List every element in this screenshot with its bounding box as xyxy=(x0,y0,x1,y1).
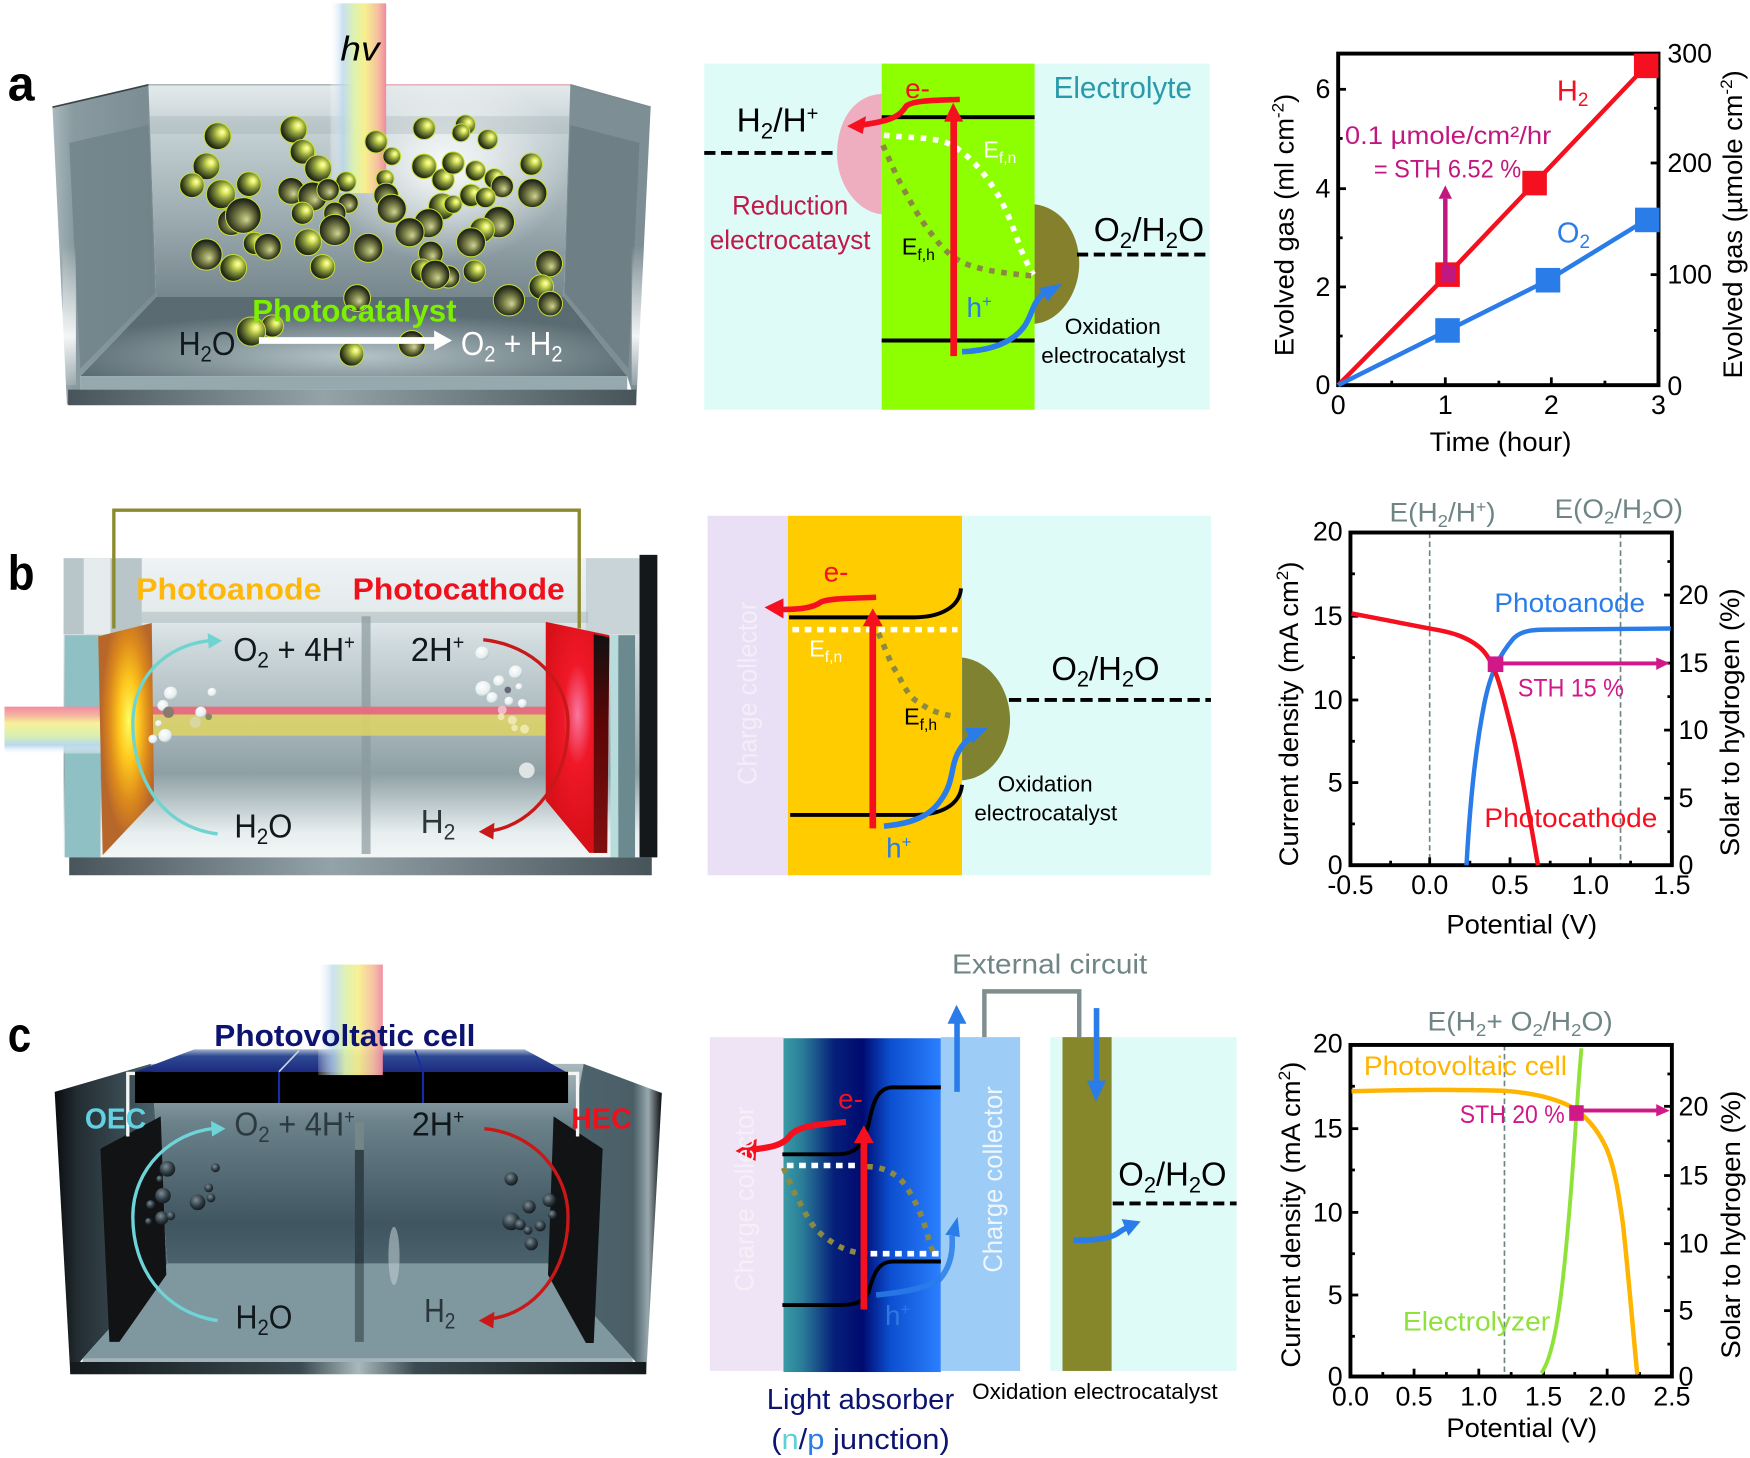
panel: photoelectrochemical tank: 2H xyxy=(411,632,454,669)
chart: current density b: /H xyxy=(1614,494,1642,524)
arrow: water to products xyxy=(259,330,452,351)
chart: current density c: 10 xyxy=(1679,1229,1708,1259)
chart: current density c: 2 xyxy=(1275,1071,1294,1080)
chart: current density b: 0 xyxy=(1328,850,1343,880)
panel: band diagram a: O xyxy=(1178,212,1204,249)
panel: PV electrolyzer tank: H xyxy=(235,1299,260,1337)
chart: current density b: Photoanode xyxy=(1494,588,1645,618)
chart: current density b: O) xyxy=(1652,494,1683,524)
panel: photoelectrochemical tank: O xyxy=(233,632,259,669)
photocathode plate xyxy=(546,622,609,853)
panel: band diagram a: /H xyxy=(1132,212,1166,249)
label: O2 + H2: 2 xyxy=(551,342,563,367)
arrow: hole xyxy=(876,1217,960,1295)
chart: evolved gas vs time: 300 xyxy=(1667,39,1712,69)
panel: band diagram b: /H xyxy=(1089,651,1122,688)
chart: current density b: 1.5 xyxy=(1653,870,1690,900)
arrow: hole xyxy=(884,728,988,826)
panel: band diagram b: e- xyxy=(824,557,848,588)
chart: current density b: 0.0 xyxy=(1411,870,1448,900)
panel: band diagram c: Light absorber xyxy=(767,1384,955,1416)
panel: band diagram a: f,n xyxy=(999,150,1016,167)
panel: PV electrolyzer tank: 2 xyxy=(257,1315,269,1340)
chart: current density b: 10 xyxy=(1313,685,1343,715)
chart: current density c: 20 xyxy=(1313,1029,1343,1059)
PV cell xyxy=(135,1049,568,1103)
panel: band diagram b: + xyxy=(902,832,911,851)
panel letter b: b xyxy=(8,546,35,600)
chart: current density b: -0.5 xyxy=(1327,870,1374,900)
chart: evolved gas vs time: ) xyxy=(1270,94,1300,103)
chart: evolved gas vs time: 2 xyxy=(1579,232,1590,253)
chart: current density c: O) xyxy=(1581,1006,1613,1036)
chart: current density b: 15 xyxy=(1679,648,1708,678)
arrow: hole xyxy=(962,284,1062,352)
panel: PV electrolyzer tank: 2 xyxy=(258,1122,270,1147)
panel: band diagram a: + xyxy=(807,104,818,126)
panel: band diagram a xyxy=(704,64,1210,410)
panel: PV electrolyzer tank: OEC xyxy=(85,1104,146,1136)
chart: evolved gas vs time: Evolved gas (µmole cm xyxy=(1718,100,1748,378)
panel: PV electrolyzer tank xyxy=(55,965,662,1374)
chart: current density b: Photocathode xyxy=(1484,803,1657,833)
panel: band diagram a: h xyxy=(967,292,982,323)
chart: current density b: Solar to hydrogen (%) xyxy=(1715,588,1745,856)
chart: current density b xyxy=(1273,494,1745,939)
panel: band diagram c: (n/p junction) xyxy=(771,1424,950,1456)
bubbles xyxy=(145,1161,557,1250)
label: O2 + H2: + H xyxy=(495,326,551,363)
panel: photoelectrochemical tank: + xyxy=(453,633,464,655)
bubbles xyxy=(148,646,535,778)
chart: evolved gas vs time: = STH 6.52 % xyxy=(1374,157,1521,184)
label: Photoanode: Photoanode xyxy=(136,573,321,607)
panel: photoelectrochemical tank: H xyxy=(234,808,259,845)
chart: evolved gas vs time: 2 xyxy=(1578,90,1588,111)
chart: evolved gas vs time: 0 xyxy=(1331,390,1346,420)
chart: evolved gas vs time: ) xyxy=(1718,70,1748,79)
chart: evolved gas vs time: 2 xyxy=(1544,390,1559,420)
panel: PV electrolyzer tank: H xyxy=(424,1293,448,1330)
chart: current density b: 2 xyxy=(1604,508,1614,528)
arrow: proton reduction cycle xyxy=(479,1129,568,1328)
chart: current density b: ) xyxy=(1274,562,1304,571)
chart: current density c: Photovoltaic cell xyxy=(1364,1051,1567,1081)
panel: band diagram b: f,h xyxy=(920,717,937,734)
panel: band diagram b: electrocatalyst xyxy=(974,801,1118,826)
external wire xyxy=(114,510,579,629)
chart: current density c: 2.5 xyxy=(1653,1382,1690,1412)
chart: current density b: 0 xyxy=(1679,850,1693,880)
panel: photoelectrochemical tank: 2 xyxy=(444,820,455,845)
chart: current density b: 5 xyxy=(1328,768,1343,798)
chart: current density c: 1.0 xyxy=(1460,1382,1497,1412)
chart: current density b: ) xyxy=(1486,497,1496,527)
chart: current density b: 2 xyxy=(1438,511,1448,531)
chart: current density c: 0 xyxy=(1328,1361,1343,1391)
chart: current density c: 2 xyxy=(1571,1020,1582,1040)
panel: PV electrolyzer tank: HEC xyxy=(571,1104,632,1136)
panel: band diagram a: + xyxy=(982,292,992,311)
panel: band diagram a: H xyxy=(737,103,761,140)
chart: current density b: 2 xyxy=(1273,571,1292,580)
arrow: STH operating point xyxy=(1488,656,1670,672)
panel: band diagram a: Oxidation xyxy=(1065,314,1161,339)
light beam b xyxy=(4,707,546,754)
arrow: excitation xyxy=(854,1125,874,1310)
chart: evolved gas vs time: 100 xyxy=(1667,260,1712,290)
chart: current density b: /H xyxy=(1448,497,1476,527)
panel: PV electrolyzer tank: + 4H xyxy=(270,1106,344,1143)
panel: band diagram c: External circuit xyxy=(952,948,1148,979)
label: O2 + H2: O xyxy=(461,326,487,363)
chart: current density c: /H xyxy=(1543,1006,1571,1036)
panel: band diagram a: Electrolyte xyxy=(1054,72,1192,105)
chart: current density c: 15 xyxy=(1313,1114,1343,1144)
chart: current density b: Potential (V) xyxy=(1446,909,1597,939)
panel: PV electrolyzer tank: 2 xyxy=(445,1308,455,1333)
panel: band diagram a: electrocatalyst xyxy=(1041,343,1186,368)
curve: quasi-Fermi level n xyxy=(884,135,1033,275)
panel: band diagram b: h xyxy=(886,832,902,863)
panel letter c: c xyxy=(8,1009,31,1063)
chart: current density c: Potential (V) xyxy=(1446,1413,1597,1443)
chart: current density c: Electrolyzer xyxy=(1403,1307,1550,1337)
arrow: external current up xyxy=(948,1005,967,1092)
chart: current density b: + xyxy=(1476,497,1486,516)
arrow: excitation xyxy=(863,608,883,828)
chart: current density c: + O xyxy=(1486,1006,1532,1036)
chart: evolved gas vs time: 2 xyxy=(1315,272,1330,302)
panel: photoelectrochemical tank: + 4H xyxy=(269,632,344,669)
electrode: HEC xyxy=(548,1116,603,1343)
arrow: electron xyxy=(735,1122,846,1161)
chart: current density c: Solar to hydrogen (%) xyxy=(1716,1091,1746,1359)
panel: photoelectrochemical tank: 2 xyxy=(257,824,268,849)
label: Photovoltatic cell: Photovoltatic cell xyxy=(214,1020,475,1053)
panel: band diagram a: 2 xyxy=(1120,228,1132,253)
chart: current density c: 0.5 xyxy=(1395,1382,1433,1412)
panel: band diagram b: f,n xyxy=(825,649,842,666)
panel: band diagram a: 2 xyxy=(1166,228,1178,253)
panel: photoelectrochemical tank: 2 xyxy=(257,648,269,673)
panel: band diagram b: E xyxy=(809,635,825,661)
chart: current density c: ) xyxy=(1276,1062,1306,1071)
chart: evolved gas vs time: 200 xyxy=(1667,148,1712,178)
chart: evolved gas vs time: Evolved gas (ml cm xyxy=(1270,123,1300,356)
chart: current density c: 1.5 xyxy=(1525,1382,1562,1412)
panel: band diagram b: Charge collector xyxy=(733,602,763,785)
panel: band diagram b: O xyxy=(1051,651,1077,688)
chart: current density b: 15 xyxy=(1313,601,1343,631)
panel: PV electrolyzer tank: + xyxy=(344,1107,355,1129)
chart: current density b: Current density (mA cm xyxy=(1274,587,1304,866)
arrow: oxidation xyxy=(1074,1219,1141,1240)
panel: photoelectrochemical tank xyxy=(4,555,657,875)
chart: current density b: 20 xyxy=(1313,516,1343,546)
panel: band diagram a: /H xyxy=(773,103,807,140)
chart: current density b: STH 15 % xyxy=(1518,676,1624,703)
chart: evolved gas vs time: 1 xyxy=(1438,390,1453,420)
chart: evolved gas vs time: 0 xyxy=(1315,370,1330,400)
curve: quasi-Fermi level h xyxy=(883,145,1031,276)
panel: band diagram a: O xyxy=(1094,212,1120,249)
chart: current density c: 5 xyxy=(1328,1280,1343,1310)
chart: current density c: 0 xyxy=(1679,1361,1693,1391)
chart: current density c: E(H xyxy=(1427,1006,1474,1036)
panel: band diagram b: 2 xyxy=(1077,667,1089,692)
chart: current density c: 2.0 xyxy=(1589,1382,1626,1412)
panel: photoelectrochemical tank: + xyxy=(344,633,355,655)
panel: band diagram c: + xyxy=(901,1300,910,1319)
chart: evolved gas vs time: 0.1 µmole/cm²/hr xyxy=(1345,123,1551,150)
panel: band diagram b: 2 xyxy=(1122,667,1134,692)
arrow: excitation xyxy=(944,103,963,356)
panel: band diagram c: h xyxy=(885,1300,901,1331)
chart: evolved gas vs time: O xyxy=(1557,217,1579,249)
panel: PV electrolyzer tank: O xyxy=(269,1299,292,1337)
arrow: water oxidation cycle xyxy=(133,633,222,834)
electrode: OEC xyxy=(100,1116,166,1342)
chart: current density c xyxy=(1275,1006,1746,1443)
panel: band diagram a: f,h xyxy=(917,247,935,264)
panel: band diagram a: 2 xyxy=(761,118,773,143)
chart: current density c: 0.0 xyxy=(1332,1382,1369,1412)
arrow: proton reduction cycle xyxy=(479,640,568,840)
panel: band diagram c: O xyxy=(1118,1157,1144,1194)
chart: current density c: STH 20 % xyxy=(1460,1102,1565,1129)
label: H2O reactant: H xyxy=(179,326,203,363)
light beam c xyxy=(318,965,383,1075)
panel: band diagram a: e- xyxy=(905,73,930,104)
arrow: external current down xyxy=(1087,1008,1106,1102)
panel: band diagram b: E xyxy=(904,704,920,730)
panel: band diagram c: Oxidation electrocatalyst xyxy=(972,1379,1218,1404)
panel: PV electrolyzer tank: O xyxy=(234,1106,260,1143)
chart: evolved gas vs time: 6 xyxy=(1315,74,1330,104)
chart: evolved gas vs time: 3 xyxy=(1651,390,1666,420)
chart: current density b: E(H xyxy=(1390,497,1436,527)
panel: band diagram c: /H xyxy=(1156,1157,1189,1194)
chart: current density b: 0.5 xyxy=(1491,870,1529,900)
label: H2O reactant: 2 xyxy=(201,342,212,367)
chart: current density b: 1.0 xyxy=(1572,870,1609,900)
panel: band diagram b: O xyxy=(1134,651,1160,688)
chart: current density b: 5 xyxy=(1679,783,1693,813)
panel: photocatalyst tank xyxy=(52,73,651,405)
label: H2O reactant: O xyxy=(212,326,235,363)
chart: current density c: 10 xyxy=(1313,1197,1343,1227)
panel: band diagram c: Charge collector xyxy=(729,1106,759,1292)
light beam a xyxy=(330,3,386,193)
label: Photocatalyst: Photocatalyst xyxy=(252,294,457,329)
chart: current density b: 2 xyxy=(1642,508,1652,528)
chart: current density c: 15 xyxy=(1679,1160,1708,1190)
panel: band diagram a: Reduction xyxy=(732,190,848,220)
panel: band diagram a: E xyxy=(902,234,917,260)
arrow: STH marker xyxy=(1439,185,1455,282)
panel: PV electrolyzer tank: + xyxy=(453,1107,464,1129)
panel: band diagram c: Charge collector xyxy=(978,1086,1008,1273)
panel: band diagram c: O xyxy=(1201,1157,1227,1194)
panel: band diagram a: E xyxy=(983,136,999,162)
panel: band diagram c: e- xyxy=(838,1084,863,1115)
chart: current density b: 10 xyxy=(1679,715,1708,745)
panel: band diagram c: 2 xyxy=(1189,1172,1201,1197)
panel: band diagram c: 2 xyxy=(1144,1172,1156,1197)
chart: evolved gas vs time: -2 xyxy=(1268,103,1287,118)
arrow: STH operating point xyxy=(1569,1104,1670,1121)
chart: current density b: E(O xyxy=(1555,494,1602,524)
panel: PV electrolyzer tank: 2H xyxy=(412,1106,455,1143)
chart: current density b: 20 xyxy=(1679,580,1708,610)
arrow: water oxidation cycle xyxy=(133,1121,225,1321)
chart: evolved gas vs time: 4 xyxy=(1315,174,1330,204)
photoanode plate xyxy=(98,623,154,855)
panel: band diagram b: Oxidation xyxy=(998,772,1093,797)
photocatalyst particles xyxy=(180,115,562,366)
chart: evolved gas vs time: H xyxy=(1557,75,1578,107)
chart: evolved gas vs time: 0 xyxy=(1667,371,1682,401)
chart: current density c: 2 xyxy=(1532,1020,1543,1040)
arrow: electron xyxy=(847,99,960,134)
chart: current density c: 20 xyxy=(1679,1091,1708,1121)
label: hv: hv xyxy=(340,30,381,68)
chart: evolved gas vs time: Time (hour) xyxy=(1430,427,1571,457)
arrow: electron xyxy=(765,597,876,618)
chart: current density c: 2 xyxy=(1476,1020,1486,1040)
panel: photoelectrochemical tank: H xyxy=(421,804,445,841)
chart: evolved gas vs time: -2 xyxy=(1717,79,1736,95)
chart: current density c: 5 xyxy=(1679,1296,1693,1326)
panel letter a: a xyxy=(8,57,35,111)
chart: current density c: Current density (mA cm xyxy=(1276,1088,1306,1368)
label: O2 + H2: 2 xyxy=(484,342,495,367)
panel: photoelectrochemical tank: O xyxy=(268,808,292,845)
panel: band diagram b xyxy=(708,516,1211,875)
label: Photocathode: Photocathode xyxy=(353,573,565,607)
panel: band diagram a: electrocatayst xyxy=(710,225,871,255)
panel: band diagram c xyxy=(710,948,1237,1456)
chart: evolved gas vs time xyxy=(1268,39,1748,457)
